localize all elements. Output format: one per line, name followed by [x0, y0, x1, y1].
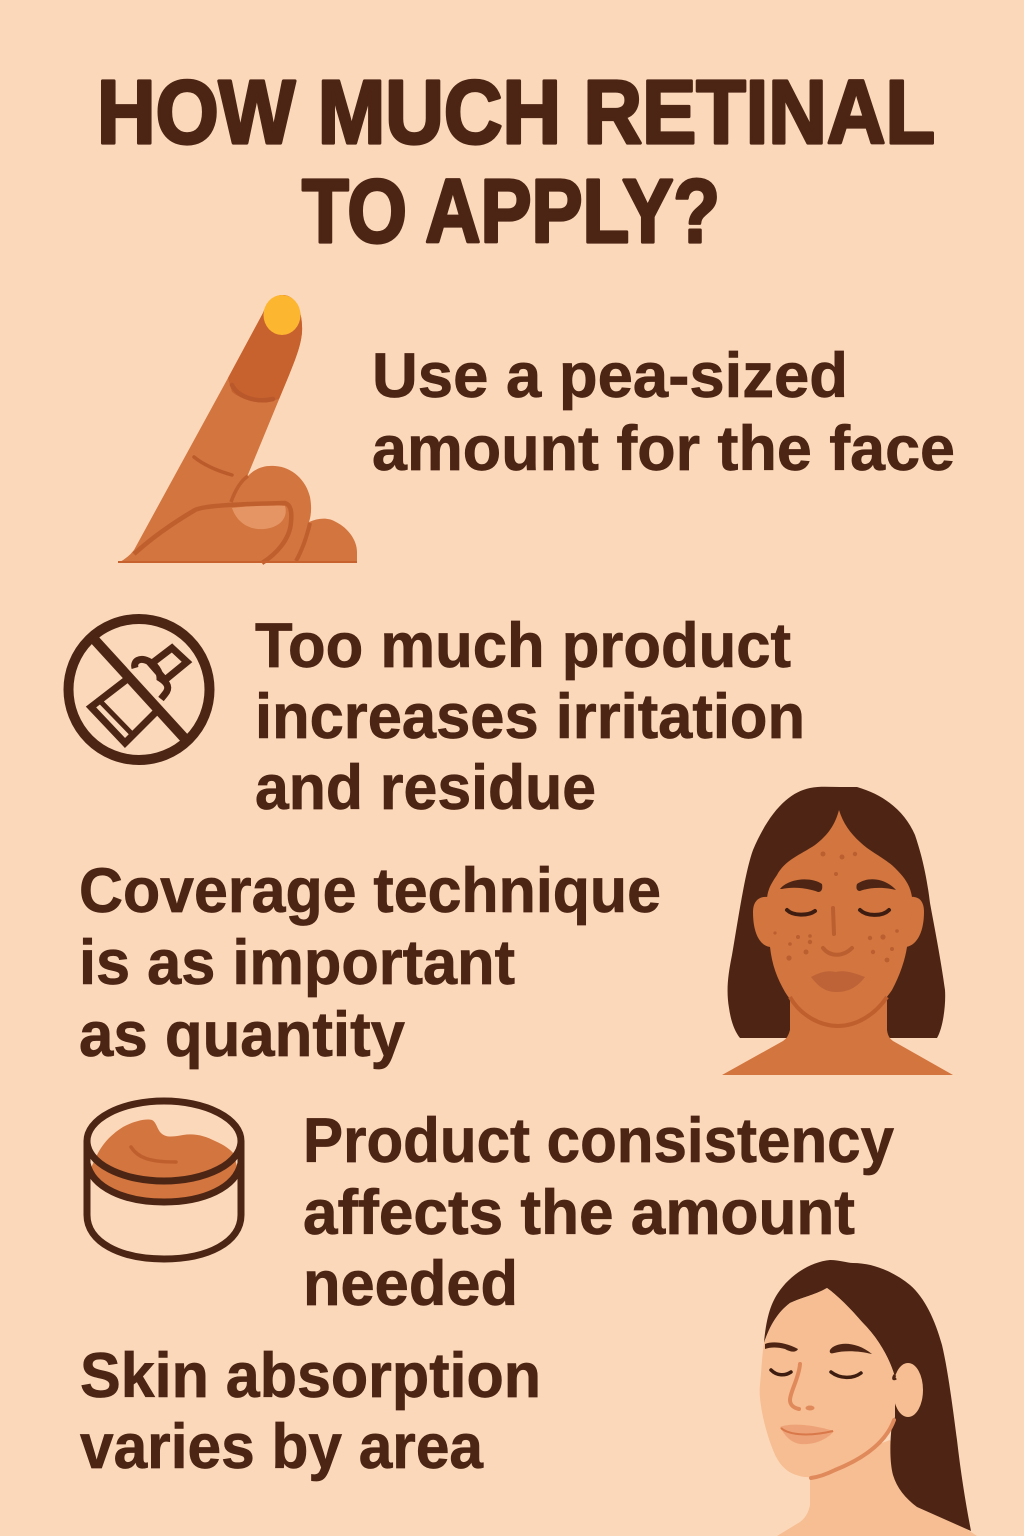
- title: TO APPLY?: [302, 162, 720, 262]
- text: too much product: and residue: [255, 753, 596, 823]
- text: too much product: Too much product: [255, 611, 791, 681]
- title: HOW MUCH RETINAL: [97, 63, 935, 163]
- text: coverage technique: is as important: [79, 928, 515, 998]
- text: product consistency: Product consistency: [303, 1106, 894, 1176]
- text: skin absorption: Skin absorption: [80, 1341, 541, 1411]
- text: coverage technique: [79, 856, 661, 1070]
- text: coverage technique: Coverage technique: [79, 856, 661, 926]
- icon: cream jar: [87, 1101, 241, 1259]
- illustration: face with freckles: [722, 787, 953, 1075]
- text: too much product: increases irritation: [255, 682, 805, 752]
- text: pea-sized amount: Use a pea-sized: [372, 341, 848, 411]
- title: [97, 63, 935, 262]
- text: pea-sized amount: [372, 341, 955, 484]
- text: product consistency: affects the amount: [303, 1178, 855, 1248]
- text: too much product: [255, 611, 805, 823]
- icon: finger with pea-sized amount: [118, 295, 357, 563]
- icon: no bottle: [68, 619, 210, 760]
- text: skin absorption: varies by area: [80, 1412, 484, 1482]
- text: product consistency: needed: [303, 1249, 518, 1319]
- text: pea-sized amount: amount for the face: [372, 414, 955, 484]
- text: coverage technique: as quantity: [79, 1000, 405, 1070]
- text: skin absorption: [80, 1341, 541, 1482]
- text: product consistency: [303, 1106, 894, 1319]
- illustration: side-tilted face: [760, 1260, 977, 1536]
